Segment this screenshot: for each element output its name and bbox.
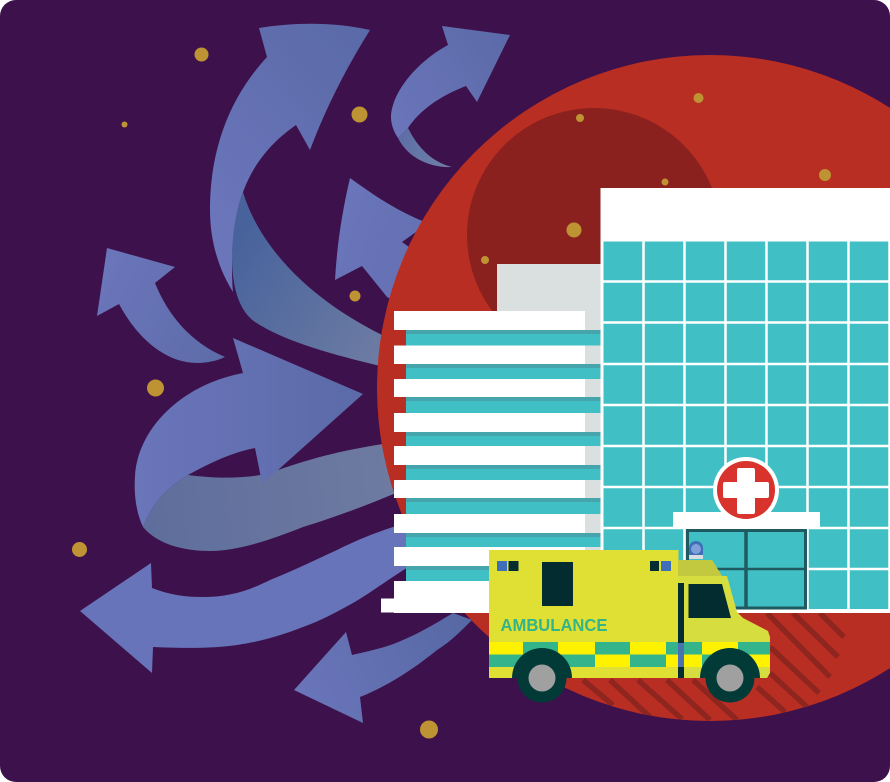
arrow: middle, head and body xyxy=(135,338,363,527)
ambulance: door pillar xyxy=(678,583,684,678)
hospital: red cross sign xyxy=(713,457,779,523)
ambulance: cab xyxy=(678,560,770,678)
gold dots: left field xyxy=(72,48,438,738)
gold dots: on disc xyxy=(481,93,831,264)
hospital: entrance canopy xyxy=(673,512,820,528)
ambulance: cab roof xyxy=(678,560,722,576)
ambulance: reflective chequer stripes xyxy=(489,642,770,667)
building: teal window bands xyxy=(406,330,600,581)
arrow: top right, ribbon tail xyxy=(398,128,452,167)
ambulance xyxy=(489,541,770,708)
arrow: centre inner notch xyxy=(402,232,416,252)
left building xyxy=(381,264,600,613)
building: white floors xyxy=(381,311,600,613)
ambulance: cab window xyxy=(688,584,731,618)
ambulance: label: AMBULANCE xyxy=(500,615,608,635)
arrow: large top, ribbon tail xyxy=(232,192,382,366)
building: gray floor ends xyxy=(585,311,600,566)
building: rear block xyxy=(497,264,600,314)
hospital: window grid xyxy=(603,241,890,610)
red disc xyxy=(377,55,890,721)
arrow: centre, pointing up-left behind the disc xyxy=(335,178,430,320)
ambulance: small rear lights xyxy=(497,561,671,571)
dark red disc: right edge xyxy=(873,168,890,312)
ambulance: front wheel xyxy=(700,648,760,708)
hospital: entrance doors xyxy=(687,530,806,608)
ambulance: blue beacon xyxy=(689,541,703,559)
arrow: middle, gray ribbon xyxy=(143,442,396,551)
ground hatching xyxy=(583,613,844,720)
arrow: large top, head and body xyxy=(210,24,370,292)
dark red disc: behind hospital xyxy=(467,108,721,362)
hospital: white roof and frame xyxy=(600,188,890,613)
ambulance: box body xyxy=(489,550,678,678)
main hospital building xyxy=(600,188,890,613)
arrow: lower long, pointing left xyxy=(80,522,410,673)
arrow: small left xyxy=(97,248,225,363)
arrow: bottom, pointing down-left xyxy=(294,613,472,723)
ambulance: side window xyxy=(542,562,573,606)
hospital: glass facade xyxy=(604,242,890,609)
ambulance: rear wheel xyxy=(512,648,572,708)
arrow: top right, head and body xyxy=(391,26,510,138)
